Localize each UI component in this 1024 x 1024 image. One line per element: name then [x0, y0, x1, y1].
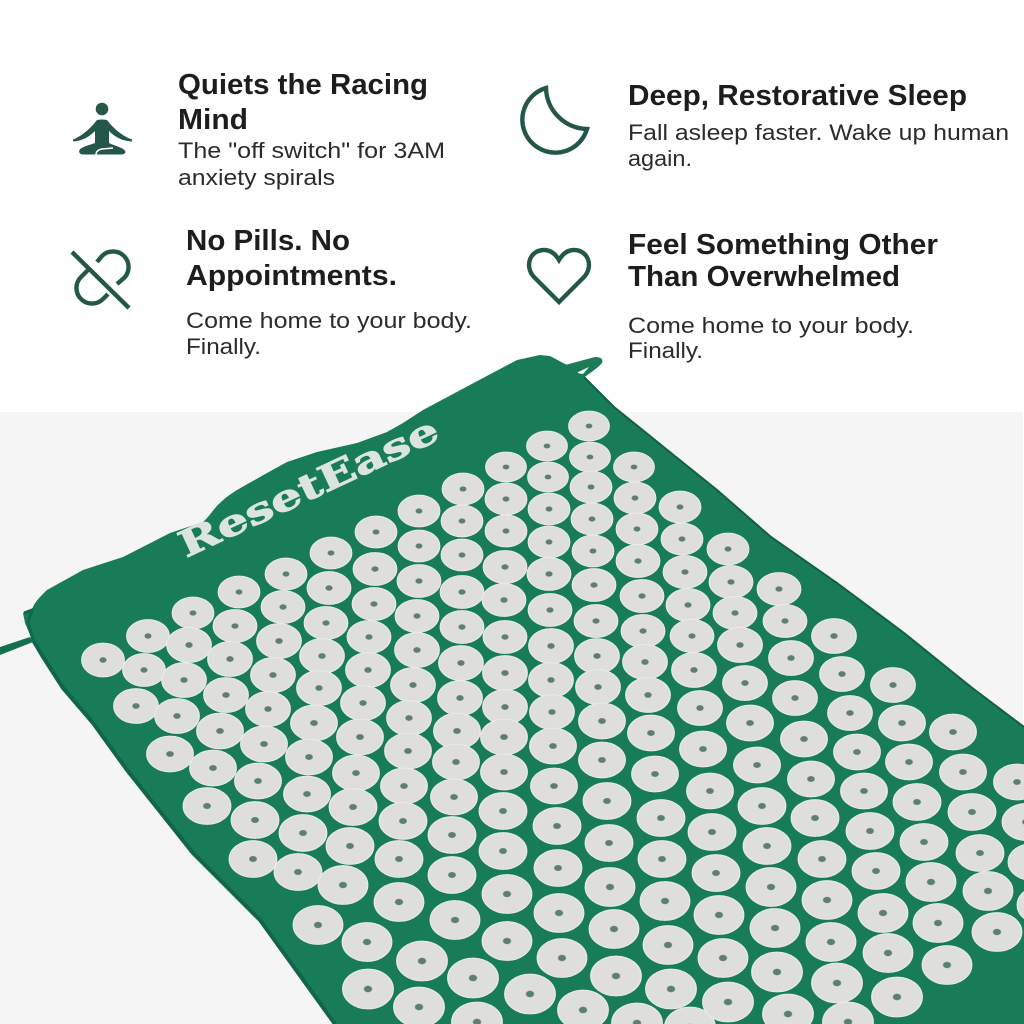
- heading: Feel Something Other: [628, 229, 938, 261]
- heading: [628, 229, 938, 293]
- icon: moon: [522, 88, 587, 153]
- mat loop left: [0, 637, 33, 655]
- brand name: ResetEase: [172, 409, 445, 566]
- body text: anxiety spirals: [178, 165, 335, 190]
- body text: Finally.: [186, 334, 261, 359]
- acupressure discs: [82, 411, 1024, 1024]
- body text: [186, 308, 472, 359]
- heading: Appointments.: [186, 260, 397, 292]
- icon: crossed-out pill: [72, 251, 129, 308]
- body text: [628, 120, 1009, 171]
- body text: Finally.: [628, 338, 703, 363]
- benefit: quiets the racing mind: [73, 69, 445, 190]
- icon: heart: [529, 250, 589, 302]
- benefit: feel something: [529, 229, 938, 363]
- heading: No Pills. No: [186, 225, 350, 257]
- acupressure mat: [0, 355, 1024, 1024]
- mat body: [23, 355, 1024, 1024]
- body text: Come home to your body.: [186, 308, 472, 333]
- mat loop top: [565, 357, 602, 378]
- heading: Quiets the Racing: [178, 69, 428, 101]
- benefit: deep sleep: [522, 80, 1009, 171]
- body text: Fall asleep faster. Wake up human: [628, 120, 1009, 145]
- heading: Mind: [178, 104, 248, 136]
- icon: meditating figure: [73, 103, 132, 155]
- heading: Deep, Restorative Sleep: [628, 80, 967, 112]
- mat edge shading: [33, 640, 335, 1024]
- body text: [628, 313, 914, 363]
- body text: Come home to your body.: [628, 313, 914, 338]
- body text: [178, 138, 445, 190]
- body text: The "off switch" for 3AM: [178, 138, 445, 163]
- heading: [178, 69, 428, 136]
- grey backdrop: [0, 412, 1023, 1024]
- heading: Than Overwhelmed: [628, 261, 900, 293]
- benefit: no pills: [72, 225, 472, 359]
- body text: again.: [628, 146, 692, 171]
- heading: [186, 225, 397, 292]
